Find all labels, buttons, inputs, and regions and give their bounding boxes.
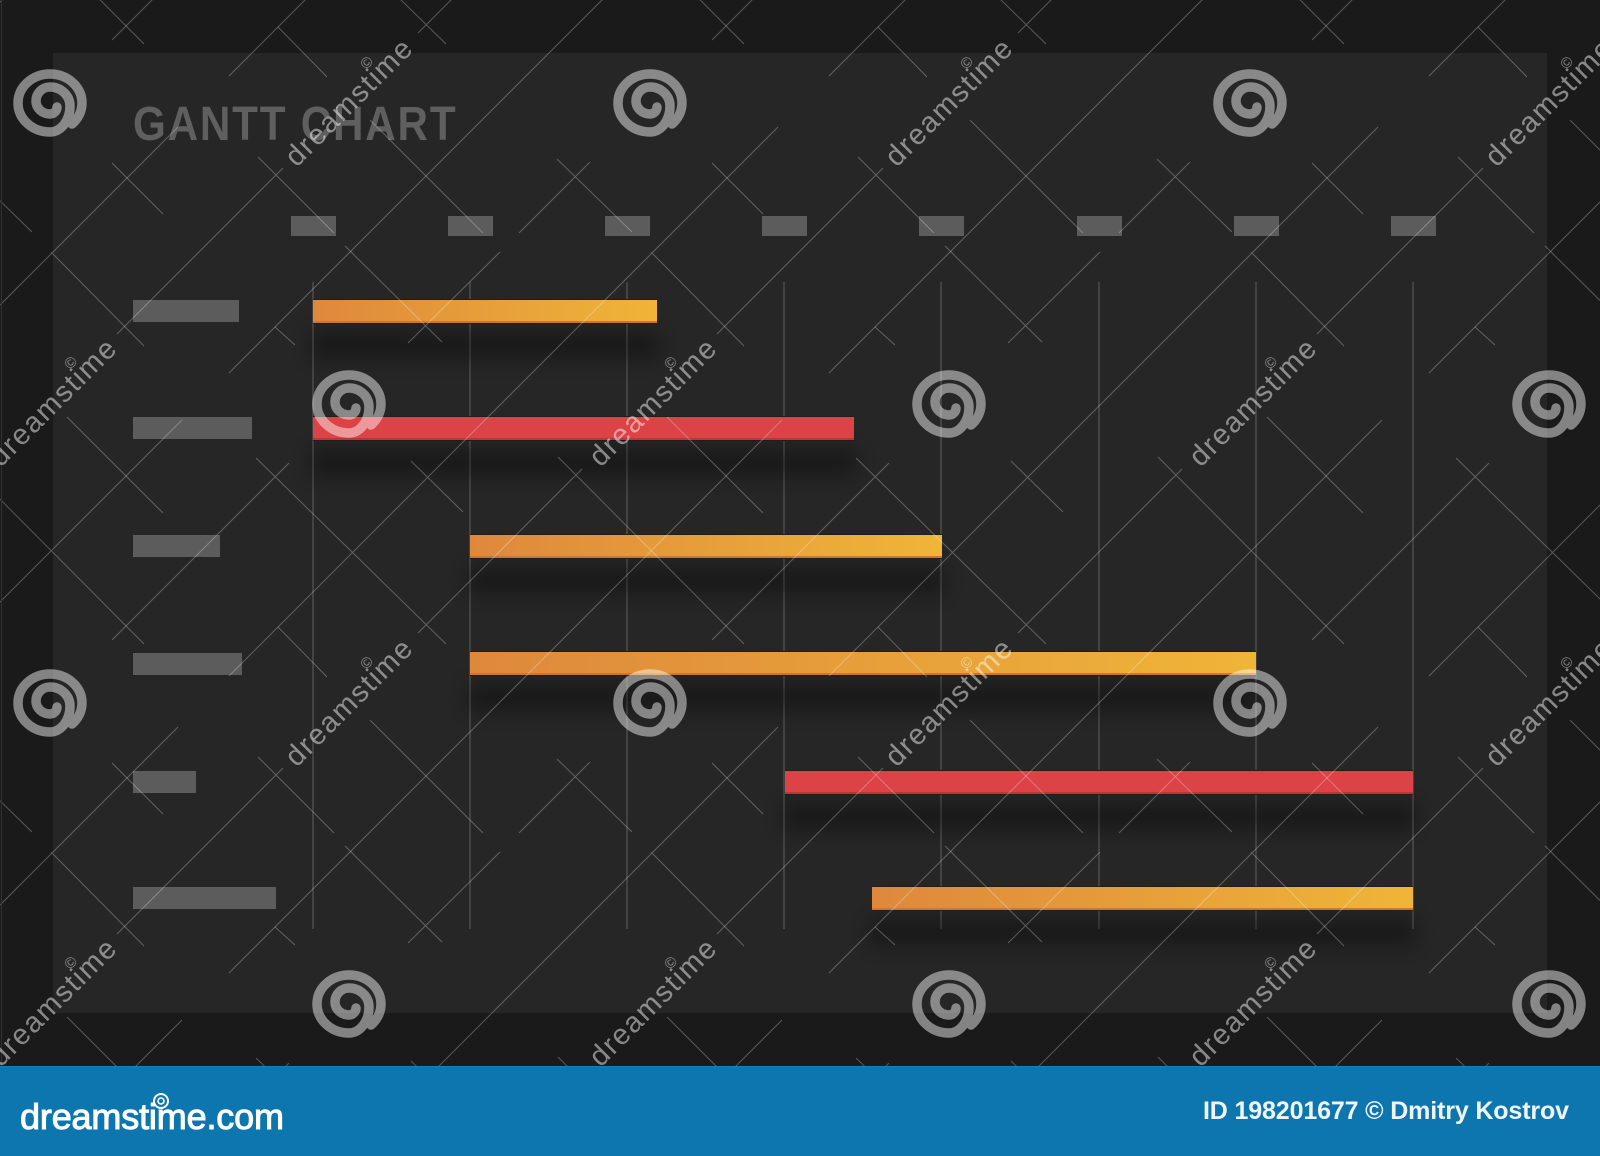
panel: chart background — [53, 53, 1547, 1013]
heading: Gantt chart title: GANTT CHART — [133, 98, 457, 151]
bar: task 5 red — [785, 771, 1413, 794]
bar: task 6 orange — [872, 887, 1413, 910]
bar: task 2 red — [313, 417, 854, 440]
wordmarks: rotated dreamstime text: © — [61, 953, 81, 973]
footer credit: image ID and author: ID 198201677 © Dmitry Kostrov — [1203, 1097, 1569, 1125]
footer band: dreamstime credit bar — [0, 1066, 1600, 1156]
wordmarks: rotated dreamstime text: © — [661, 953, 681, 973]
footer logo: dreamstime.com: dreamstime.com — [20, 1096, 284, 1137]
wordmarks: rotated dreamstime text: dreamstime — [879, 33, 1019, 173]
row labels: task name placeholders — [133, 300, 276, 909]
bar: task 4 orange — [470, 652, 1256, 675]
grid: vertical timeline lines — [312, 282, 1414, 929]
wordmarks: rotated dreamstime text: © — [1261, 353, 1281, 373]
wordmarks: rotated dreamstime text: dreamstime — [279, 633, 419, 773]
wordmarks: rotated dreamstime text: dreamstime — [879, 633, 1019, 773]
wordmarks: rotated dreamstime text: © — [661, 353, 681, 373]
wordmarks: rotated dreamstime text: © — [1557, 53, 1577, 73]
wordmarks: rotated dreamstime text: dreamstime — [279, 33, 419, 173]
wordmarks: rotated dreamstime text: © — [357, 53, 377, 73]
wordmarks: rotated dreamstime text: dreamstime — [583, 333, 723, 473]
wordmarks: rotated dreamstime text: © — [1261, 953, 1281, 973]
bar: task 1 orange — [313, 300, 657, 323]
bar: task 3 orange — [470, 535, 942, 558]
wordmarks: rotated dreamstime text: © — [61, 353, 81, 373]
wordmarks: rotated dreamstime text: © — [357, 653, 377, 673]
wordmarks: rotated dreamstime text: © — [957, 53, 977, 73]
wordmarks: rotated dreamstime text: © — [1557, 653, 1577, 673]
wordmarks: rotated dreamstime text: dreamstime — [1183, 333, 1323, 473]
wordmarks: rotated dreamstime text: © — [957, 653, 977, 673]
column labels: timeline header placeholders — [291, 216, 1436, 236]
